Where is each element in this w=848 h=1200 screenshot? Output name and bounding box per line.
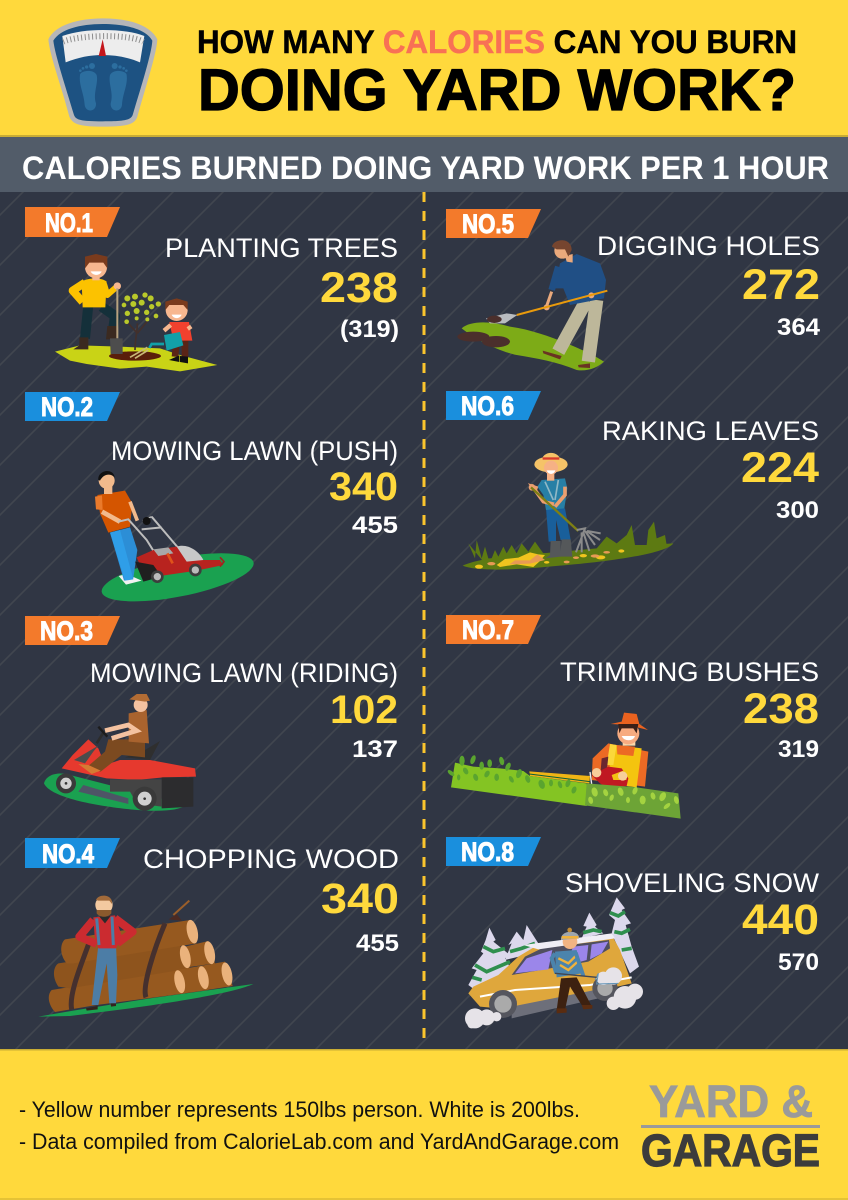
yellow value: 340 — [321, 875, 399, 923]
logo: yard and garage: GARAGE — [641, 1125, 820, 1176]
panel: shoveling snow — [446, 837, 820, 1028]
logo: yard and garage — [641, 1076, 820, 1176]
badge: no.2 — [25, 392, 120, 422]
yellow value: 440 — [742, 896, 819, 944]
badge: no.7 — [446, 615, 541, 645]
yellow value: 238 — [320, 264, 398, 312]
label: PLANTING TREES — [165, 233, 398, 263]
icon: person raking leaves — [463, 453, 673, 570]
footnote 2: - Data compiled from CalorieLab.com and YardAndGarage.com — [19, 1129, 619, 1154]
icon: man on riding mower — [44, 694, 196, 811]
label: SHOVELING SNOW — [565, 868, 820, 898]
panel: raking leaves — [446, 391, 819, 570]
yellow value: 340 — [329, 465, 398, 509]
white value: (319) — [340, 316, 399, 343]
badge: no.2: NO.2 — [41, 392, 93, 422]
badge: no.1: NO.1 — [45, 208, 93, 238]
footer banner — [0, 1049, 848, 1200]
white value: 137 — [352, 736, 398, 763]
badge: no.3 — [25, 616, 120, 646]
icon: man digging — [457, 240, 607, 370]
title line 2: DOING YARD WORK? — [198, 58, 796, 123]
label: TRIMMING BUSHES — [560, 657, 819, 687]
panel: digging holes — [446, 209, 821, 370]
badge: no.6 — [446, 391, 541, 421]
icon: man trimming hedge — [447, 713, 681, 819]
section heading bar — [0, 137, 848, 192]
icon: man shoveling snow beside car — [465, 897, 643, 1028]
icon: lumberjack with logs — [38, 896, 253, 1017]
badge: no.8: NO.8 — [461, 837, 514, 867]
footnote 1: - Yellow number represents 150lbs person. White is 200lbs. — [19, 1097, 580, 1122]
badge: no.4 — [25, 838, 120, 869]
badge: no.8 — [446, 837, 541, 867]
badge: no.7: NO.7 — [462, 615, 514, 645]
section heading bar: CALORIES BURNED DOING YARD WORK PER 1 HOUR — [22, 150, 829, 186]
title line 1: HOW MANY CALORIES CAN YOU BURN — [197, 24, 797, 60]
badge: no.4: NO.4 — [42, 839, 94, 869]
white value: 300 — [776, 497, 819, 524]
white value: 319 — [778, 736, 819, 763]
panel: planting trees — [25, 207, 399, 371]
white value: 364 — [777, 314, 821, 341]
yellow value: 238 — [743, 685, 819, 733]
label: MOWING LAWN (PUSH) — [111, 436, 398, 466]
badge: no.3: NO.3 — [40, 616, 93, 646]
badge: no.5 — [446, 209, 541, 239]
label: MOWING LAWN (RIDING) — [90, 658, 398, 688]
white value: 455 — [352, 512, 398, 539]
yellow value: 224 — [741, 444, 819, 492]
panel: mowing lawn push — [25, 392, 398, 611]
white value: 455 — [356, 930, 399, 957]
panel: chopping wood — [25, 838, 399, 1017]
center dashed divider — [422, 192, 426, 1040]
icon: man pushing lawn mower — [95, 471, 257, 611]
badge: no.6: NO.6 — [461, 391, 514, 421]
badge: no.5: NO.5 — [462, 209, 514, 239]
icon: father and son planting tree — [55, 254, 217, 371]
yellow value: 102 — [330, 688, 398, 732]
badge: no.1 — [25, 207, 120, 238]
panel: mowing lawn riding — [25, 616, 398, 811]
logo: yard and garage: YARD & — [649, 1076, 813, 1127]
panel: trimming bushes — [446, 615, 819, 819]
icon: weighing scale — [48, 18, 157, 127]
label: CHOPPING WOOD — [143, 844, 399, 874]
white value: 570 — [778, 949, 819, 976]
label: RAKING LEAVES — [602, 416, 819, 446]
label: DIGGING HOLES — [597, 231, 820, 261]
header banner — [0, 0, 848, 137]
yellow value: 272 — [742, 261, 820, 309]
